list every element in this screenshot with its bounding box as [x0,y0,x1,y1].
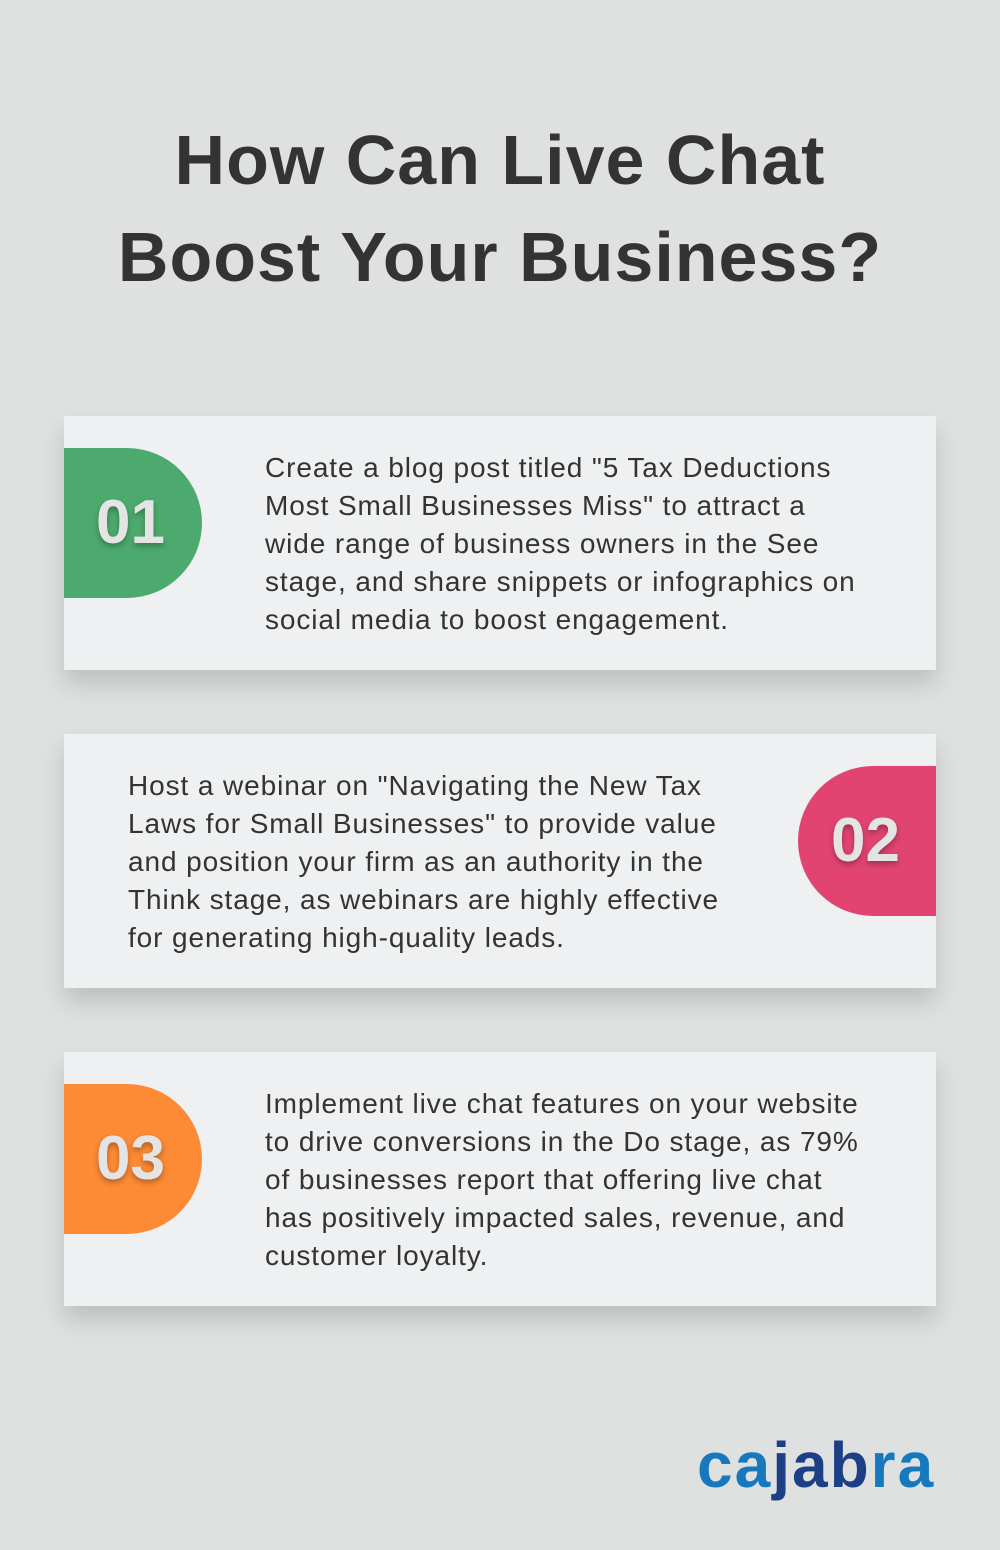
text: step 03 [265,1088,859,1271]
text: step 03: customer loyalty. [265,1240,488,1271]
text: step 02 [128,770,719,953]
text: step 02: Host a webinar on "Navigating the New Tax [128,770,702,801]
text: step 02: Think stage, as webinars are highly effective [128,884,719,915]
text: step 02: Laws for Small Businesses" to provide value [128,808,717,839]
badge: 01: 01 [96,488,165,557]
panel: step 01 [64,416,936,670]
title [118,121,882,296]
title: How Can Live Chat [175,121,825,199]
badge: 02 [798,766,936,916]
text: step 01: Most Small Businesses Miss" to attract a [265,490,806,521]
badge: 03 [64,1084,202,1234]
text: step 01: stage, and share snippets or infographics on [265,566,856,597]
badge: 02: 02 [831,806,900,875]
text: step 03: has positively impacted sales, revenue, and [265,1202,845,1233]
text: step 02: for generating high-quality leads. [128,922,565,953]
text: step 03: to drive conversions in the Do stage, as 79% [265,1126,859,1157]
logo: cajabra: cajabra [697,1429,935,1501]
text: step 03: of businesses report that offering live chat [265,1164,822,1195]
text: step 01: wide range of business owners in the See [265,528,819,559]
text: step 02: and position your firm as an authority in the [128,846,704,877]
badge: 01 [64,448,202,598]
badge: 03: 03 [96,1124,165,1193]
title: Boost Your Business? [118,218,882,296]
text: step 03: Implement live chat features on your website [265,1088,859,1119]
text: step 01: Create a blog post titled "5 Tax Deductions [265,452,831,483]
text: step 01: social media to boost engagement. [265,604,729,635]
text: step 01 [265,452,856,635]
panel: step 03 [64,1052,936,1306]
panel: step 02 [64,734,936,988]
